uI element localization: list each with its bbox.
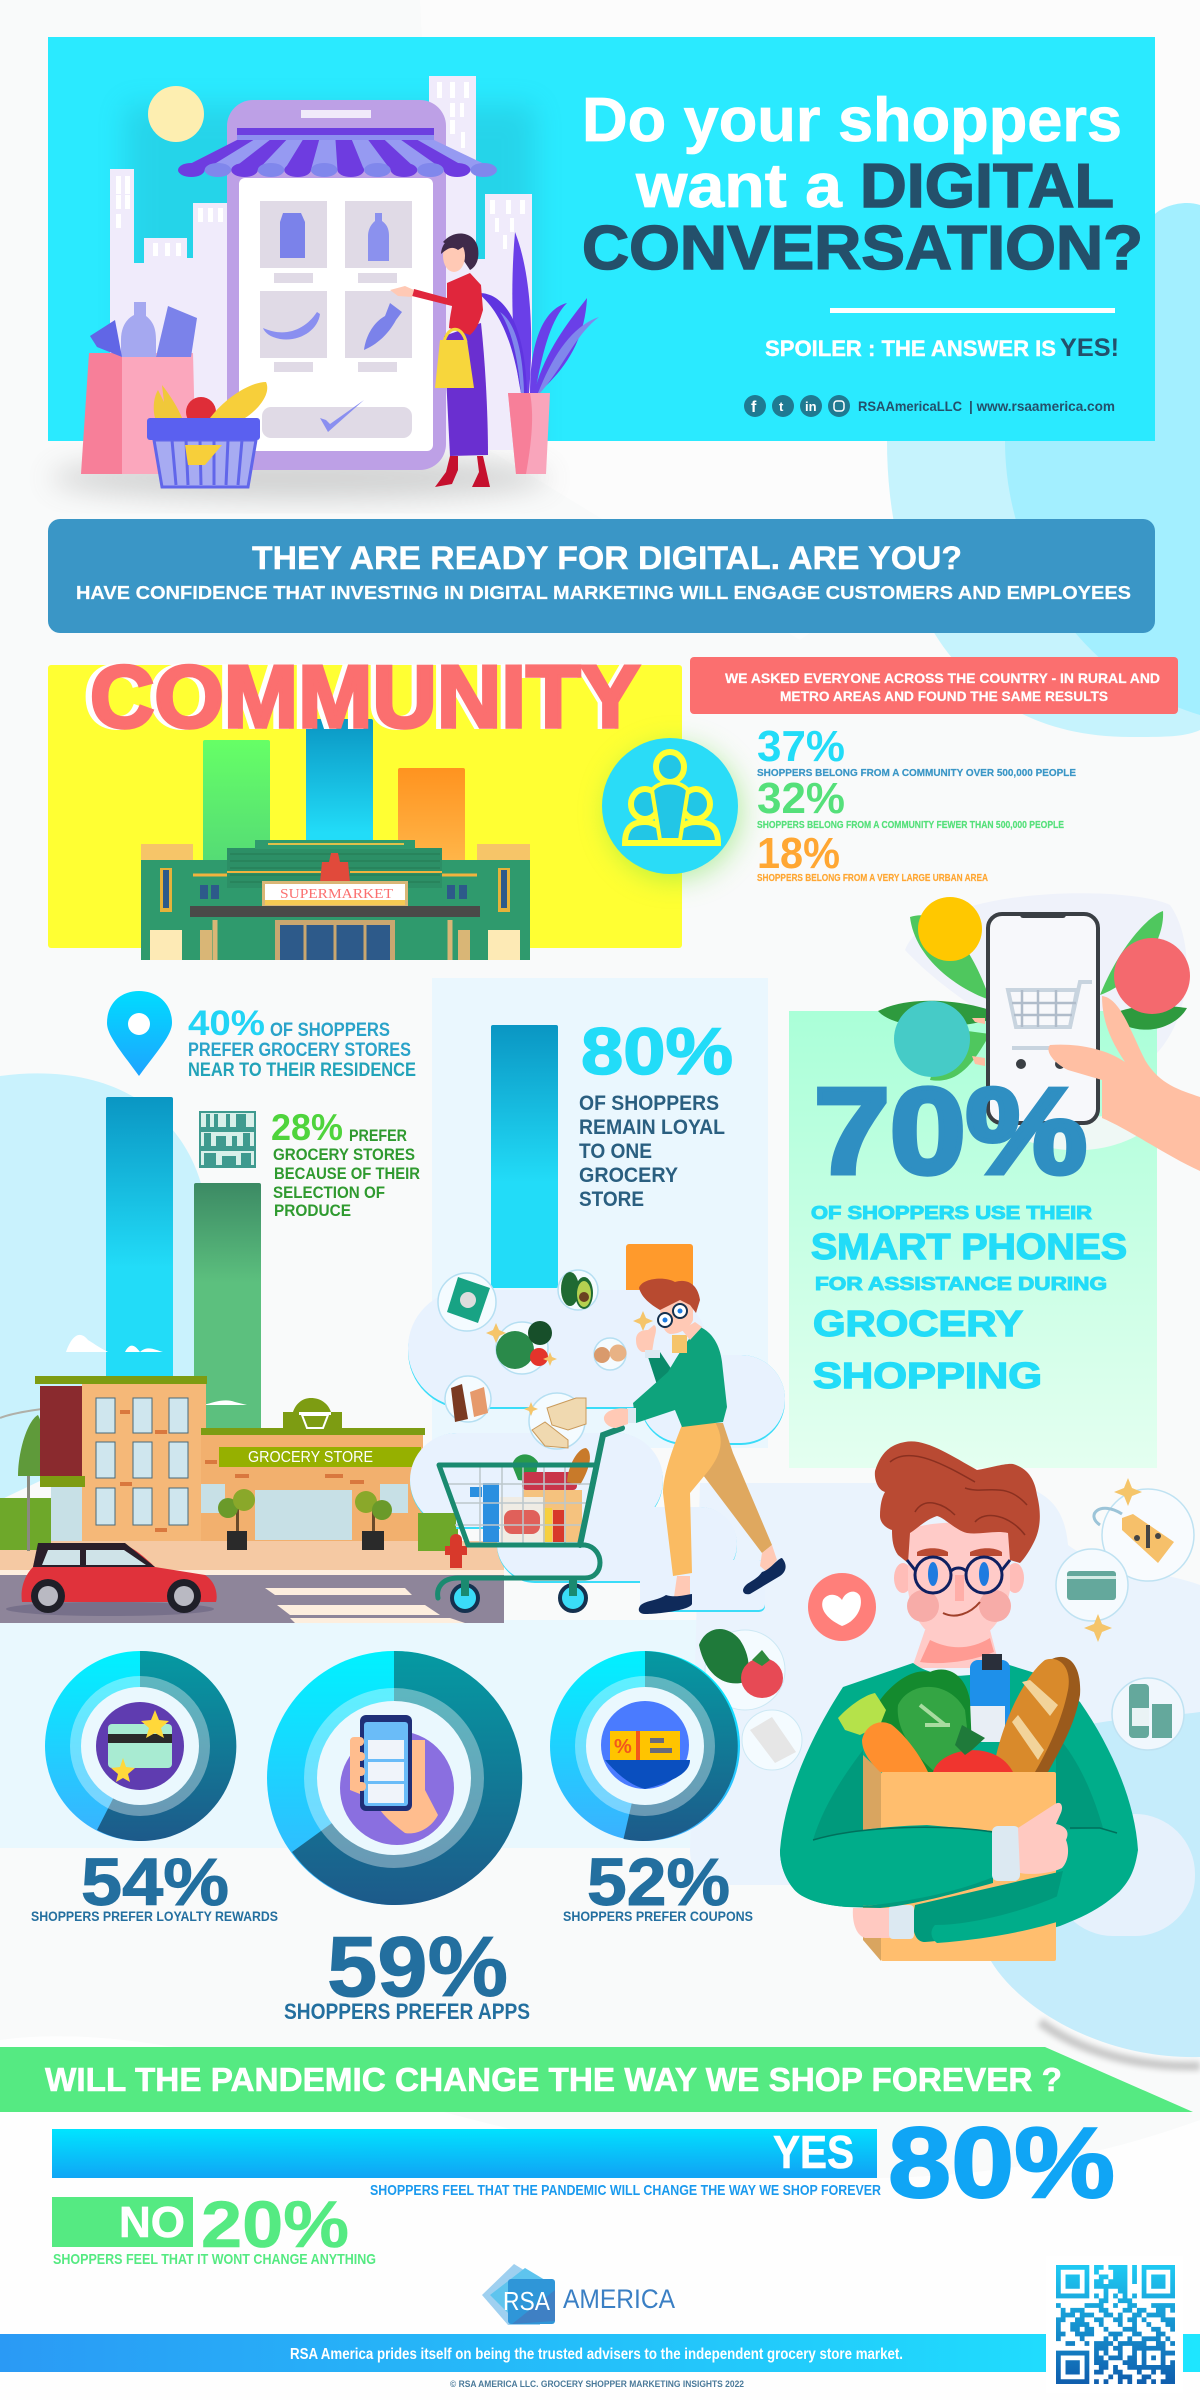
hair [875, 1441, 1040, 1563]
social links: | www.rsaamerica.com [969, 398, 1115, 414]
chart: coupons donut [550, 1651, 740, 1841]
stats: community [757, 722, 1076, 884]
banner: ready for digital: HAVE CONFIDENCE THAT INVESTING IN DIGITAL MARKETING WILL ENGAGE CUSTOMERS AND EMPLOYEES [76, 582, 1131, 603]
basket [147, 382, 267, 487]
bar: no 20 percent [52, 2187, 376, 2268]
spoiler text [765, 308, 1119, 362]
stat: 28 percent selection: BECAUSE OF THEIR [274, 1164, 420, 1183]
social links: f [751, 399, 757, 416]
icon: price tag bubble [1094, 1478, 1194, 1581]
cloud behind shopper [408, 1290, 785, 1612]
raised arm [648, 1352, 680, 1394]
stat 37 percent [757, 722, 1076, 779]
cart glyph on screen [1008, 982, 1092, 1048]
groceries in bag [838, 1654, 1080, 1772]
social links [744, 395, 1115, 417]
social links: in [805, 399, 817, 414]
callout: asked everyone: METRO AREAS AND FOUND THE SAME RESULTS [780, 689, 1108, 704]
icon: produce and paper roll [699, 1629, 802, 1770]
plants [218, 1489, 392, 1550]
stat: 40 percent near residence: OF SHOPPERS [270, 1020, 390, 1041]
label: loyalty rewards [31, 1845, 278, 1924]
banner: ready for digital: THEY ARE READY FOR DIGITAL. ARE YOU? [252, 540, 962, 576]
70 percent heading: 70% [814, 1063, 1087, 1199]
panel: 70 percent smart phones [789, 893, 1200, 1468]
label: apps [284, 1920, 530, 2024]
tall building [35, 1376, 207, 1541]
produce bubbles [438, 1270, 653, 1449]
icon: coupon: % [614, 1736, 632, 1758]
footer bar [0, 2334, 1200, 2372]
pink shopping bag [81, 302, 197, 474]
icon: location pin [107, 991, 172, 1076]
chart: apps donut [267, 1651, 522, 1905]
back leg [695, 1423, 772, 1553]
supermarket building [141, 840, 530, 960]
icon: heart bubble [808, 1573, 876, 1641]
lower hand [853, 1908, 890, 1938]
community bars [203, 719, 465, 909]
eggs [594, 1338, 626, 1370]
head [660, 1298, 693, 1334]
bar: small orange [626, 1244, 693, 1304]
label: apps: SHOPPERS PREFER APPS [284, 1999, 530, 2024]
torso and arm [633, 1327, 727, 1427]
body [780, 1663, 1138, 1943]
greens [496, 1321, 552, 1374]
stat: 28 percent selection: SELECTION OF [273, 1183, 385, 1202]
trees and lawn [0, 1406, 458, 1551]
bar: no 20 percent: 20% [201, 2187, 349, 2261]
stat: 80 percent loyal: STORE [579, 1188, 644, 1211]
banner: pandemic question: WILL THE PANDEMIC CHANGE THE WAY WE SHOP FOREVER ? [45, 2061, 1062, 2098]
stat 32 percent [757, 774, 1064, 831]
logo: RSA America [482, 2264, 675, 2325]
stat: 80 percent loyal: REMAIN LOYAL [579, 1116, 725, 1139]
stat 18 percent: SHOPPERS BELONG FROM A VERY LARGE URBAN AREA [757, 873, 988, 884]
stat 37 percent: 37% [757, 722, 845, 771]
label: coupons: 52% [587, 1845, 730, 1920]
icon: loyalty card [96, 1702, 184, 1790]
shopping cart [438, 1428, 622, 1611]
stat 32 percent: 32% [757, 774, 845, 823]
drink and neck [672, 1335, 687, 1353]
community heading: COMMUNITY [90, 647, 640, 746]
upper hand [992, 1826, 1020, 1881]
stat: 80 percent loyal: TO ONE [579, 1140, 652, 1163]
stat 18 percent: 18% [757, 829, 840, 878]
red car [6, 1543, 217, 1616]
panel: 80 percent background [432, 978, 768, 1448]
social links: t [779, 399, 784, 414]
label: coupons [563, 1845, 753, 1924]
packet [438, 1273, 496, 1331]
bread [529, 1393, 586, 1449]
store front: GROCERY STORE [248, 1449, 373, 1466]
panel: community [48, 647, 682, 960]
stat: 28 percent selection [271, 1107, 420, 1220]
lower arm [913, 1871, 1063, 1942]
banner: pandemic question [0, 2047, 1193, 2112]
logo: RSA America: AMERICA [563, 2284, 675, 2314]
icon: community people [602, 738, 741, 879]
smart phones text: GROCERY [813, 1303, 1023, 1344]
label: apps: 59% [327, 1920, 508, 2015]
hero title: DIGITAL [860, 152, 1114, 221]
callout: asked everyone: WE ASKED EVERYONE ACROSS THE COUNTRY - IN RURAL AND [725, 671, 1160, 686]
stat: 40 percent near residence: PREFER GROCERY STORES [188, 1040, 411, 1061]
smart phones text: OF SHOPPERS USE THEIR [811, 1203, 1092, 1223]
stat: 80 percent loyal [579, 1014, 733, 1211]
awning [178, 128, 497, 177]
stat: 40 percent near residence: NEAR TO THEIR RESIDENCE [188, 1060, 416, 1081]
bar: yes 80 percent [52, 2107, 1115, 2219]
spoiler text: YES! [1060, 334, 1119, 362]
stat: 80 percent loyal: GROCERY [579, 1164, 678, 1187]
stat: 28 percent selection: PRODUCE [274, 1201, 351, 1220]
spoiler text: SPOILER : THE ANSWER IS [765, 336, 1056, 361]
stat: 40 percent near residence [188, 1004, 416, 1081]
hero title: want a [635, 152, 843, 221]
glasses and eyes [907, 1548, 1010, 1616]
phone with leaves and hand [878, 897, 1200, 1171]
stat 37 percent: SHOPPERS BELONG FROM A COMMUNITY OVER 500,000 PEOPLE [757, 768, 1076, 779]
hero title: CONVERSATION? [582, 214, 1143, 283]
icon: phone in hand [340, 1715, 454, 1845]
plant [478, 232, 599, 474]
shopper with cart [604, 1279, 786, 1614]
bar: no 20 percent: NO [119, 2198, 185, 2247]
front leg [663, 1422, 721, 1576]
sauces [445, 1376, 491, 1422]
smart phones text [811, 1203, 1127, 1396]
illustration: storefront phone [50, 76, 599, 500]
thumbs up hand [636, 1325, 656, 1352]
community heading: COMMUNITY [84, 647, 636, 746]
upper arm [780, 1825, 993, 1907]
label: loyalty rewards: SHOPPERS PREFER LOYALTY REWARDS [31, 1908, 278, 1924]
icon: card bubble [1056, 1549, 1128, 1642]
stat 32 percent: SHOPPERS BELONG FROM A COMMUNITY FEWER THAN 500,000 PEOPLE [757, 820, 1064, 831]
label: coupons: SHOPPERS PREFER COUPONS [563, 1908, 753, 1924]
bar: yes 80 percent: SHOPPERS FEEL THAT THE PANDEMIC WILL CHANGE THE WAY WE SHOP FOREVER [370, 2182, 881, 2199]
hydrant [418, 1513, 467, 1568]
man with groceries [780, 1441, 1138, 1961]
logo: RSA America: RSA [503, 2286, 551, 2316]
bar: no 20 percent: SHOPPERS FEEL THAT IT WONT CHANGE ANYTHING [53, 2251, 376, 2268]
woman [390, 233, 490, 487]
avocado [558, 1270, 598, 1310]
QR code [1046, 2256, 1183, 2393]
supermarket building: SUPERMARKET [280, 887, 393, 902]
stat: 80 percent loyal: 80% [581, 1014, 733, 1088]
bar: 28 percent [194, 1183, 261, 1433]
stat: 28 percent selection: GROCERY STORES [273, 1145, 415, 1164]
stat: 28 percent selection: 28% [271, 1107, 343, 1148]
copyright: © RSA AMERICA LLC. GROCERY SHOPPER MARKETING INSIGHTS 2022 [450, 2379, 744, 2389]
icon: store shelves [199, 1111, 256, 1168]
grocery bag [881, 1772, 1056, 1961]
stat: 80 percent loyal: OF SHOPPERS [579, 1092, 719, 1115]
grocery street scene [0, 1376, 504, 1623]
stat 18 percent [757, 829, 988, 884]
banner: ready for digital [48, 519, 1155, 633]
icon: bottle bubble [1112, 1678, 1184, 1750]
icon: coupon [601, 1701, 690, 1789]
sparkles [486, 1311, 653, 1416]
social links: RSAAmericaLLC [858, 398, 962, 414]
bar: 80 percent [491, 1025, 558, 1288]
label: loyalty rewards: 54% [81, 1845, 229, 1920]
chart: loyalty rewards donut [45, 1651, 236, 1841]
neck [912, 1630, 1000, 1668]
callout: asked everyone [690, 657, 1178, 714]
hand [1048, 996, 1200, 1171]
head [894, 1563, 912, 1593]
store front [201, 1398, 425, 1550]
road [0, 1541, 504, 1623]
bar: yes 80 percent: YES [773, 2126, 854, 2178]
smart phones text: SHOPPING [813, 1355, 1042, 1396]
stat: 40 percent near residence: 40% [188, 1004, 265, 1043]
smart phones text: SMART PHONES [811, 1226, 1127, 1267]
bar: 40 percent [66, 1097, 173, 1382]
hero title: Do your shoppers [582, 86, 1122, 155]
bar: yes 80 percent: 80% [888, 2107, 1115, 2219]
stat: 28 percent selection: PREFER [349, 1126, 407, 1145]
footer bar: RSA America prides itself on being the trusted advisers to the independent grocery store market. [290, 2346, 903, 2363]
smart phones text: FOR ASSISTANCE DURING [815, 1274, 1107, 1294]
hero title [582, 86, 1143, 283]
